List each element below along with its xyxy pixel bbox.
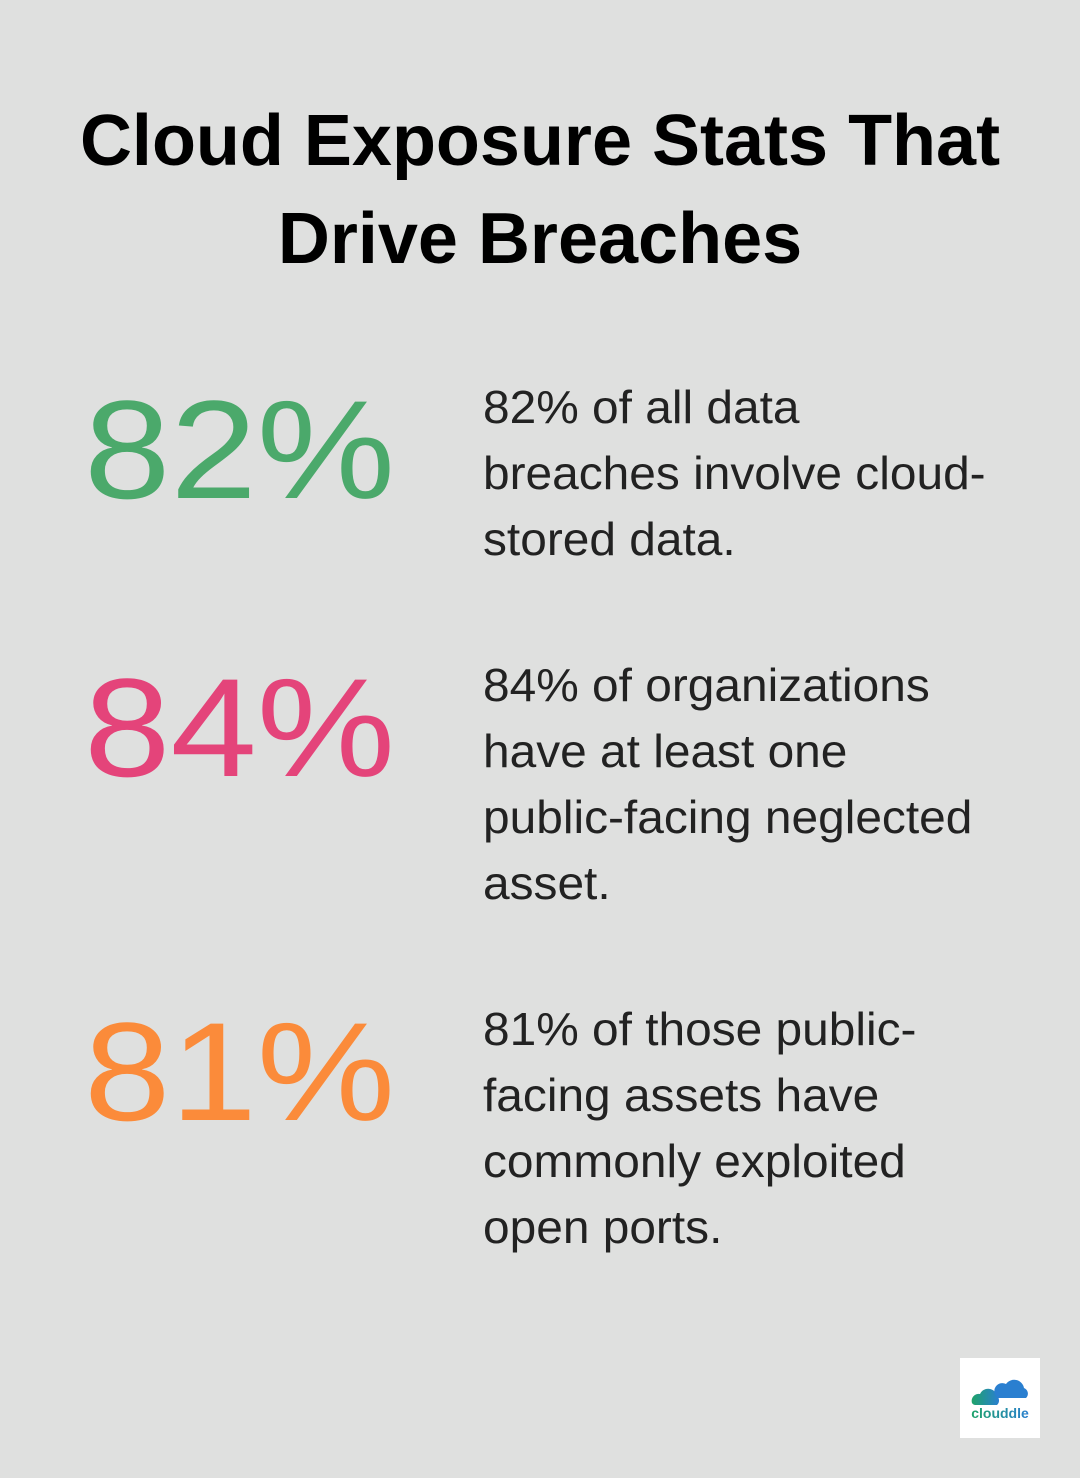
logo: clouddle — [971, 1405, 1029, 1421]
stat 1 text: stored data. — [483, 513, 736, 565]
title — [80, 101, 1000, 279]
stat 1 text — [483, 381, 986, 565]
stat 3 text: open ports. — [483, 1201, 722, 1253]
title: Drive Breaches — [278, 199, 802, 279]
stat 1 text: 82% of all data — [483, 381, 800, 433]
stat 1 text: breaches involve cloud- — [483, 447, 986, 499]
logo — [960, 1358, 1040, 1438]
stat 3 text: commonly exploited — [483, 1135, 906, 1187]
stat 3 text: facing assets have — [483, 1069, 879, 1121]
stat 3 number: 81% — [84, 993, 395, 1150]
stat 2 text: 84% of organizations — [483, 659, 930, 711]
stat 3 text: 81% of those public- — [483, 1003, 916, 1055]
stat 3 text — [483, 1003, 916, 1253]
stat 2 text: have at least one — [483, 725, 847, 777]
stat 2 text: asset. — [483, 857, 611, 909]
stat 1 number: 82% — [84, 371, 395, 528]
stat 2 text — [483, 659, 972, 909]
stat 2 text: public-facing neglected — [483, 791, 972, 843]
stat 2 number: 84% — [84, 649, 395, 806]
title: Cloud Exposure Stats That — [80, 101, 1000, 181]
